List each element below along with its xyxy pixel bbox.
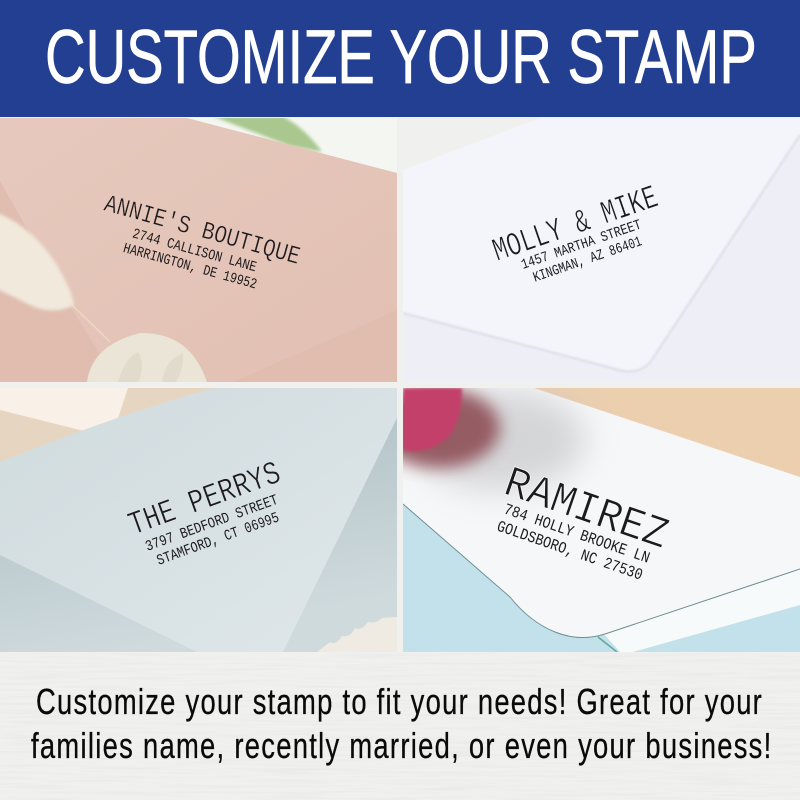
white envelope flap	[403, 388, 800, 638]
textured paper corner	[403, 118, 540, 170]
envelope back sheet	[600, 565, 800, 652]
address: Molly and Mike: 1457 MARTHA STREET	[519, 217, 644, 274]
address: The Perrys: THE PERRYS	[124, 455, 286, 544]
title: CUSTOMIZE YOUR STAMP	[45, 15, 757, 100]
background greenery	[188, 118, 397, 173]
address: The Perrys: 3797 BEDFORD STREET	[143, 492, 281, 556]
footer text block	[0, 653, 800, 800]
envelope flap	[0, 118, 397, 352]
address: The Perrys	[126, 462, 280, 564]
panel: Molly & Mike white envelope	[403, 118, 800, 382]
address: Ramirez: GOLDSBORO, NC 27530	[494, 518, 645, 585]
wood grain texture	[0, 653, 800, 800]
address: Ramirez: 784 HOLLY BROOKE LN	[501, 501, 652, 568]
address: Annie's Boutique: HARRINGTON, DE 19952	[121, 241, 258, 293]
soft grey shading near yarn	[415, 390, 585, 490]
pink yarn ball	[403, 388, 462, 451]
address: Molly and Mike: MOLLY & MIKE	[488, 179, 663, 270]
footer line 2: families name, recently married, or even your business!	[31, 725, 771, 766]
white envelope flap	[403, 118, 800, 371]
wood table background	[530, 388, 800, 480]
flap edge line	[403, 504, 800, 638]
feather stem	[72, 305, 110, 342]
cream card corner	[0, 388, 128, 433]
blurred shadow of yarn	[376, 388, 500, 468]
teal envelope edge	[598, 637, 617, 652]
scalloped paper	[317, 617, 397, 652]
panel: The Perrys blue envelope	[0, 388, 397, 652]
address: The Perrys: STAMFORD, CT 06995	[155, 510, 282, 570]
panel: Ramirez white envelope	[376, 388, 800, 652]
address: Ramirez: RAMIREZ	[497, 459, 674, 562]
flap edge shadow	[403, 135, 800, 371]
address: Molly and Mike: KINGMAN, AZ 86401	[531, 234, 644, 287]
blue envelope flap	[0, 388, 397, 652]
header banner	[0, 0, 800, 117]
footer line 1: Customize your stamp to fit your needs! Great for your	[36, 681, 762, 722]
panel: Annie's Boutique pink envelope	[0, 116, 397, 382]
address: Annie's Boutique: ANNIE'S BOUTIQUE	[101, 190, 303, 272]
wax seal	[87, 333, 207, 382]
cream background	[0, 388, 215, 465]
pampas feather	[0, 212, 74, 310]
address: Annie's Boutique: 2744 CALLISON LANE	[130, 227, 258, 276]
address: Molly and Mike	[491, 185, 658, 282]
